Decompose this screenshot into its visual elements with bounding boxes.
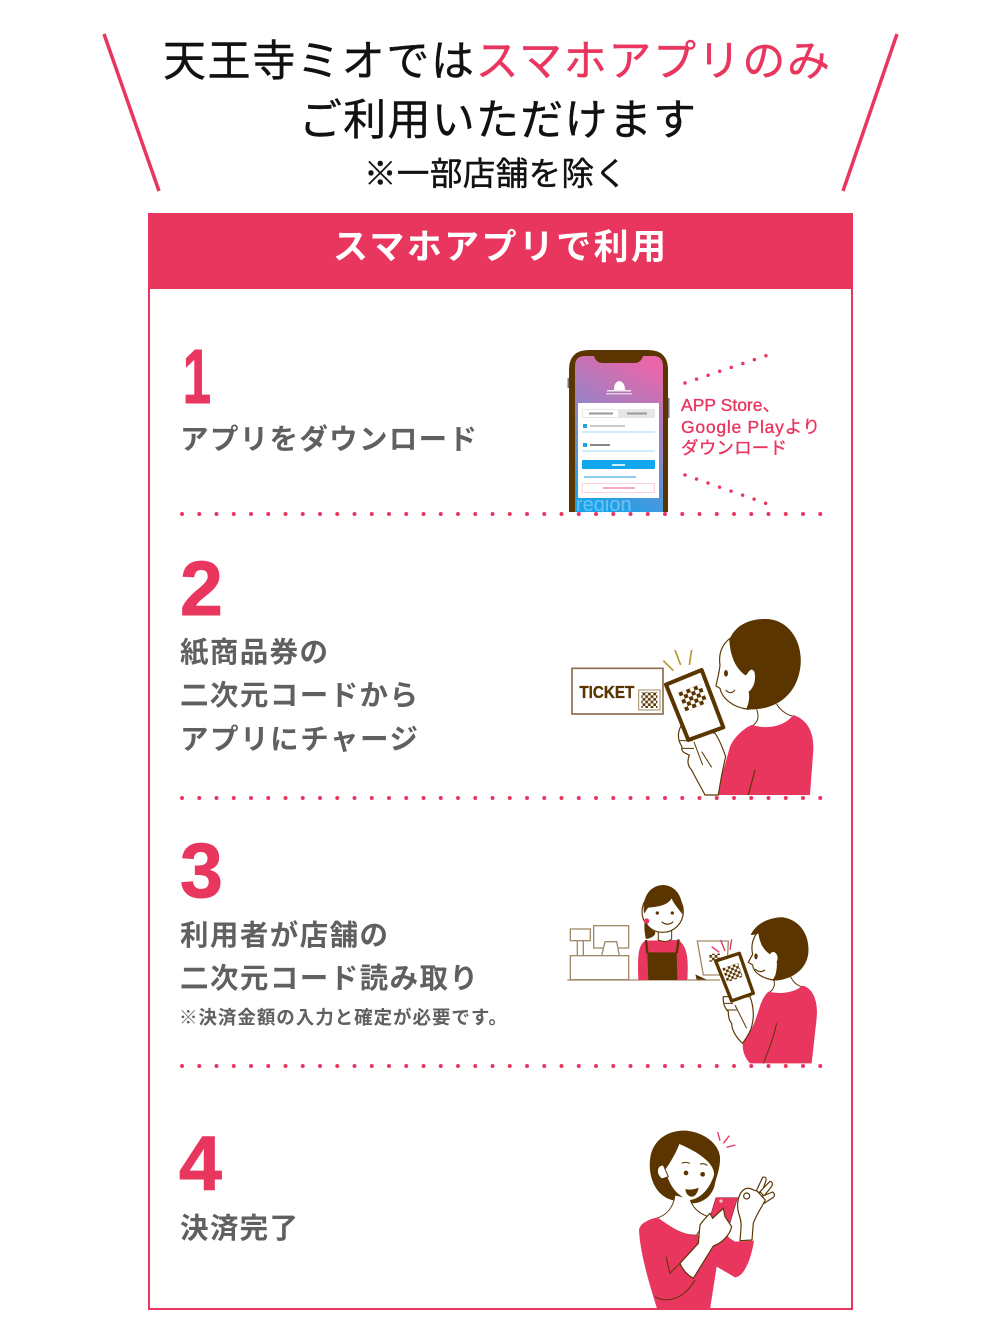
divider dots 3 — [182, 1064, 822, 1068]
step 2 number: 2 — [180, 546, 223, 632]
sweater — [710, 715, 813, 795]
decorative slash: left — [104, 34, 159, 191]
title: ご利用いただけます — [299, 97, 696, 145]
customer neck and face — [748, 917, 808, 992]
step 3 number: 3 — [180, 828, 223, 914]
counter line — [567, 978, 720, 982]
icon: phone with app login screen: region — [576, 494, 632, 516]
title: ※一部店舗を除く — [364, 156, 627, 192]
hand — [678, 727, 726, 795]
panel header — [148, 213, 853, 289]
illustration: woman with phone OK sign — [639, 1131, 775, 1309]
step 3 label: ※決済金額の入力と確定が必要です。 — [179, 1007, 507, 1028]
step 2 label: 二次元コードから — [180, 680, 418, 712]
callout: download text: ダウンロード — [681, 438, 787, 458]
dots: callout upper — [685, 356, 766, 383]
callout: download text: Google Playより — [681, 417, 820, 437]
step 1 label: アプリをダウンロード — [180, 423, 477, 456]
sparkle lines — [663, 650, 692, 671]
face — [665, 1144, 714, 1200]
customer hand — [723, 997, 753, 1043]
divider dots 2 — [182, 796, 822, 800]
ticket: TICKET — [579, 682, 635, 702]
callout: download text: APP Store、 — [681, 395, 780, 415]
neck — [657, 1195, 708, 1235]
payment terminal — [695, 939, 732, 980]
step 2 label: 紙商品券の — [180, 637, 328, 669]
step 3 label: 利用者が店舗の — [180, 919, 388, 952]
step 2 label: アプリにチャージ — [180, 724, 418, 756]
divider dots 1 — [182, 512, 822, 516]
callout: download text — [681, 395, 820, 458]
title — [163, 38, 830, 192]
phone with QR — [716, 953, 753, 1001]
customer sweater — [743, 986, 817, 1063]
title: 天王寺ミオではスマホアプリのみ — [163, 38, 830, 86]
illustration: ticket and woman scanning — [572, 619, 813, 795]
OK hand — [738, 1177, 775, 1241]
staff — [638, 885, 688, 980]
icon: phone with app login screen — [568, 350, 670, 516]
hand holding phone — [680, 1208, 732, 1278]
neck and face — [716, 619, 801, 726]
step 1 number: 1 — [183, 333, 211, 420]
step 3 label: 二次元コード読み取り — [180, 963, 478, 995]
step 3 label — [179, 919, 507, 1028]
panel: app steps — [148, 213, 853, 1309]
panel header: スマホアプリで利用 — [333, 228, 666, 267]
illustration: counter, staff and customer scanning — [567, 885, 817, 1063]
register — [570, 926, 629, 980]
step 2 label — [180, 637, 418, 756]
dots: callout lower — [685, 475, 766, 504]
phone — [709, 1198, 738, 1225]
sweater — [639, 1217, 754, 1309]
step 4 number: 4 — [179, 1121, 222, 1207]
step 4 label: 決済完了 — [180, 1213, 298, 1245]
ticket — [572, 668, 663, 714]
tablet with QR — [666, 670, 723, 740]
back hair — [650, 1131, 720, 1203]
decorative slash: right — [843, 34, 897, 191]
sparkle lines — [718, 1132, 735, 1147]
